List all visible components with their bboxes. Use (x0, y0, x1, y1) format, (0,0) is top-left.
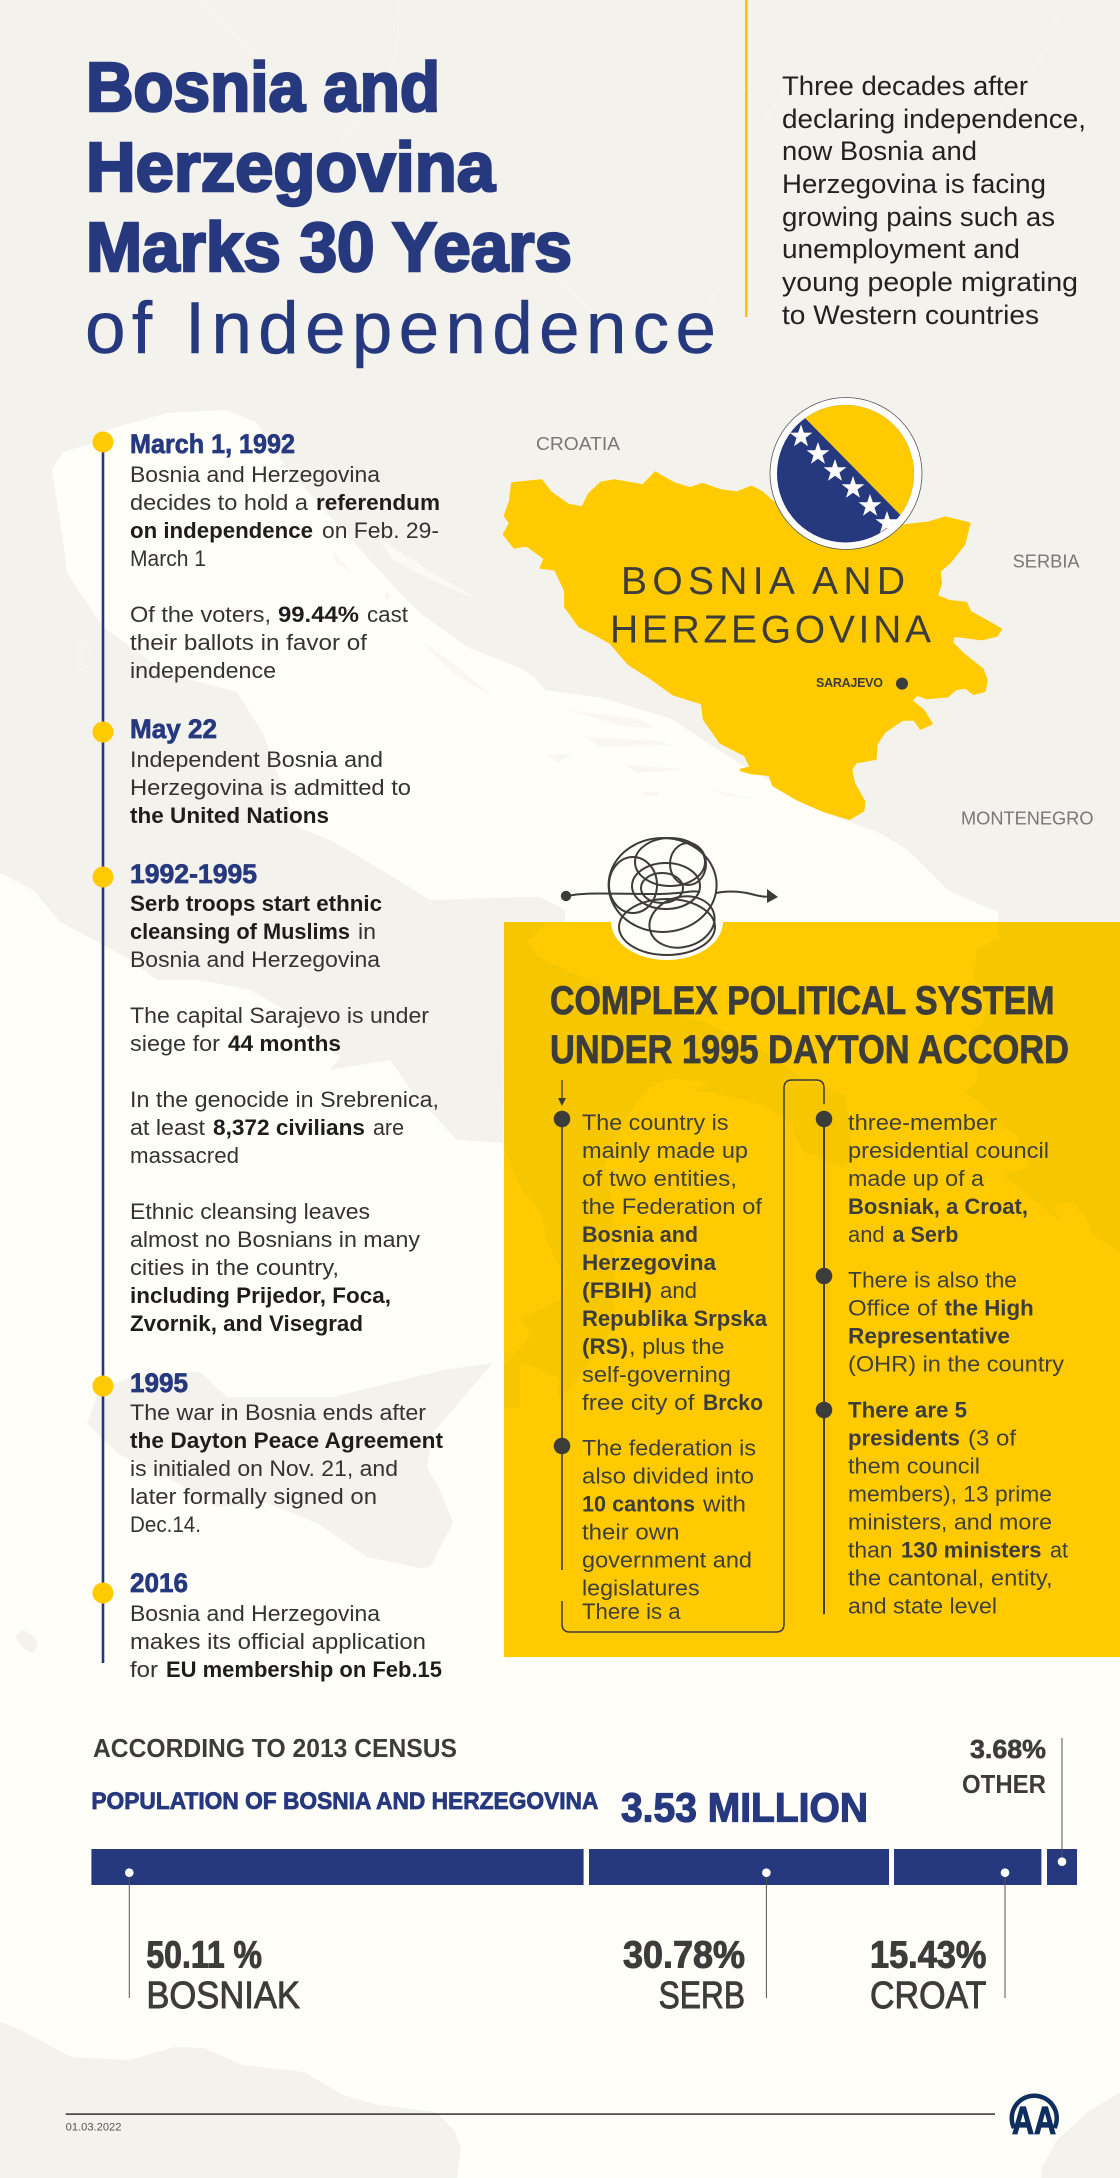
intro text: declaring independence, (782, 104, 1086, 134)
event: 1992-1995: 8,372 civilians (213, 1115, 365, 1140)
column 1 text: The country is (582, 1110, 728, 1135)
column 1 text: free city of (582, 1390, 695, 1415)
value: Other (962, 1734, 1046, 1799)
event: 1995 (92, 1368, 444, 1537)
neighbour label: Montenegro: MONTENEGRO (961, 809, 1094, 829)
event: 2016 (92, 1568, 442, 1682)
intro text: Herzegovina is facing (782, 169, 1046, 199)
column 2 text: members), 13 prime (848, 1482, 1052, 1507)
leader lines (129, 1738, 1062, 1998)
intro text: now Bosnia and (782, 136, 977, 166)
sea channel details (377, 537, 480, 600)
event: March 1, 1992: Bosnia and Herzegovina (130, 462, 381, 487)
column 2 text: (OHR) in the country (848, 1352, 1064, 1376)
event: March 1, 1992 (92, 429, 440, 683)
capital: Sarajevo: SARAJEVO (816, 676, 883, 690)
column 1 text: (RS) (582, 1334, 628, 1359)
column 2 text: three-member (848, 1110, 997, 1135)
column 2 text: the cantonal, entity, (848, 1566, 1053, 1591)
event: 1992-1995: The capital Sarajevo is under (130, 1003, 429, 1028)
panel background (504, 922, 1120, 1657)
event: March 1, 1992: referendum (316, 490, 440, 515)
census section (91, 1733, 1077, 2017)
column 1 text: legislatures (582, 1576, 700, 1600)
event: March 1, 1992: on independence (130, 518, 313, 543)
column 2 text: There are 5 (848, 1398, 967, 1423)
event: May 22 (92, 714, 411, 828)
neighbour label: Croatia: CROATIA (536, 434, 620, 454)
event: 1992-1995: cleansing of Muslims (130, 919, 350, 944)
column 2 text (848, 1110, 1068, 1619)
column 1 text: also divided into (582, 1464, 754, 1488)
event: 1992-1995: 44 months (228, 1031, 341, 1056)
value: Bosniak (146, 1935, 300, 2017)
bar markers (125, 1857, 1066, 1877)
country name: BOSNIA AND (621, 560, 905, 603)
event: 1992-1995: at least (130, 1115, 205, 1140)
event: 1992-1995: massacred (130, 1143, 239, 1168)
event: March 1, 1992: independence (130, 658, 276, 683)
event: March 1, 1992: decides to hold a (130, 490, 309, 515)
column 1 text: mainly made up (582, 1138, 748, 1163)
map: Bosnia and Herzegovina (504, 434, 1093, 829)
column 2 text: presidents (848, 1426, 960, 1451)
column 2 text: (3 of (968, 1426, 1017, 1451)
timeline axis (102, 442, 104, 1663)
column 1 text: Bosnia and (582, 1222, 698, 1247)
intro text: unemployment and (782, 234, 1020, 264)
stacked population bar (91, 1849, 1077, 1885)
notch behind squiggle (611, 921, 723, 960)
column 1 text: the Federation of (582, 1194, 763, 1219)
event: 1992-1995 (92, 859, 439, 1336)
population value: 3.53 MILLION (621, 1785, 868, 1831)
value: Croat (870, 1935, 986, 2017)
event: 1995: Dec.14. (130, 1512, 201, 1537)
event: 1995: 1995 (130, 1368, 188, 1398)
event: 1992-1995: are (373, 1115, 404, 1140)
event: 1992-1995: 1992-1995 (130, 859, 257, 889)
panel: complex political system (504, 921, 1120, 1657)
column 1 text: with (702, 1492, 746, 1516)
column 1 text: Republika Srpska (582, 1306, 768, 1331)
event: 2016: 2016 (130, 1568, 188, 1598)
event: March 1, 1992: on Feb. 29- (322, 518, 439, 543)
value: Serb (623, 1935, 745, 2017)
column 1 text: government and (582, 1548, 752, 1572)
event: 1992-1995: Zvornik, and Visegrad (130, 1311, 363, 1336)
event: 2016: EU membership on Feb.15 (166, 1657, 442, 1682)
column 2 text: and state level (848, 1594, 997, 1619)
panel map texture (504, 922, 1120, 1408)
census heading: ACCORDING TO 2013 CENSUS (93, 1733, 457, 1763)
event: 2016: for (130, 1657, 158, 1682)
event: 1992-1995: almost no Bosnians in many (130, 1227, 420, 1252)
timeline (92, 429, 444, 1682)
event: March 1, 1992: 99.44% (278, 602, 359, 627)
column 2 text: made up of a (848, 1166, 985, 1191)
event: 1995: later formally signed on (130, 1484, 377, 1509)
footer (66, 2096, 1057, 2143)
column 2 text: Representative (848, 1324, 1010, 1348)
value: Other: OTHER (962, 1769, 1046, 1799)
column 1 text: of two entities, (582, 1166, 737, 1191)
icon: Bosnian flag (770, 397, 922, 550)
event: March 1, 1992: March 1, 1992 (130, 429, 295, 459)
column 2 text: a Serb (892, 1222, 958, 1247)
column 2 text: at (1050, 1538, 1068, 1563)
column 1 text: Herzegovina (582, 1250, 717, 1275)
event: 1992-1995: cities in the country, (130, 1255, 339, 1280)
event: May 22: Independent Bosnia and (130, 747, 383, 772)
intro text: to Western countries (782, 300, 1039, 330)
intro text: Three decades after (782, 71, 1028, 101)
column 2 text: them council (848, 1454, 980, 1479)
title: Bosnia and (86, 48, 440, 126)
column 2 text: Office of (848, 1296, 938, 1320)
event: 1992-1995: Bosnia and Herzegovina (130, 947, 381, 972)
flow dots and arrow head (554, 1098, 832, 1454)
population label: POPULATION OF BOSNIA AND HERZEGOVINA (91, 1788, 598, 1815)
event: March 1, 1992: March 1 (130, 546, 206, 571)
column 2 text: 130 ministers (901, 1538, 1042, 1563)
column 2 text: presidential council (848, 1138, 1049, 1163)
event: 2016: makes its official application (130, 1629, 426, 1654)
value: Serb: SERB (659, 1975, 745, 2017)
value: Croat: 15.43% (870, 1935, 986, 1977)
footer rule (66, 2113, 995, 2115)
connector flow lines (562, 1080, 824, 1632)
event: 1992-1995: Serb troops start ethnic (130, 891, 382, 916)
column 1 text: Brcko (703, 1390, 763, 1415)
event: 2016: Bosnia and Herzegovina (130, 1601, 381, 1626)
column 1 text (582, 1110, 768, 1624)
event: 1992-1995: in (358, 919, 376, 944)
event: 1992-1995: siege for (130, 1031, 220, 1056)
column 2 text: than (848, 1538, 892, 1563)
event: 1992-1995: Ethnic cleansing leaves (130, 1199, 370, 1224)
title: Marks 30 Years (86, 208, 572, 286)
column 2 text: the High (945, 1296, 1034, 1320)
icon: tangled line arrow (561, 838, 778, 955)
value: Serb: 30.78% (623, 1935, 745, 1977)
neighbour label: Serbia: SERBIA (1013, 552, 1080, 572)
column 2 text: There is also the (848, 1268, 1017, 1292)
column 1 text: self-governing (582, 1362, 731, 1387)
column 1 text: , plus the (629, 1334, 724, 1359)
column 2 text: and (848, 1222, 885, 1247)
event: 1995: The war in Bosnia ends after (130, 1400, 426, 1425)
value: Croat: CROAT (870, 1975, 986, 2017)
column 1 text: 10 cantons (582, 1492, 695, 1516)
title: of Independence (85, 288, 716, 369)
column 1 text: The federation is (582, 1436, 756, 1460)
event: March 1, 1992: Of the voters, (130, 602, 271, 627)
intro text: young people migrating (782, 267, 1078, 297)
title (85, 48, 716, 369)
column 2 text: Bosniak, a Croat, (848, 1194, 1028, 1219)
column 2 text: ministers, and more (848, 1510, 1052, 1535)
title: Herzegovina (86, 128, 496, 206)
event: 1992-1995: including Prijedor, Foca, (130, 1283, 391, 1308)
event: May 22: the United Nations (130, 803, 329, 828)
country name: HERZEGOVINA (610, 608, 931, 652)
value: Bosniak: BOSNIAK (146, 1975, 300, 2017)
coastal islands (333, 550, 762, 800)
event: May 22: May 22 (130, 714, 217, 744)
column 1 text: their own (582, 1520, 680, 1544)
event: March 1, 1992: cast (367, 602, 408, 627)
panel heading (550, 979, 1069, 1072)
event: 1995: the Dayton Peace Agreement (130, 1428, 444, 1453)
event: 1992-1995: In the genocide in Srebrenica, (130, 1087, 439, 1112)
icon: AA logo: AA (1012, 2100, 1056, 2143)
column 1 text: (FBIH) (582, 1278, 652, 1303)
yellow vertical divider (745, 0, 748, 317)
event: 1995: is initialed on Nov. 21, and (130, 1456, 398, 1481)
value: Bosniak: 50.11 % (146, 1935, 262, 1977)
country name (610, 560, 931, 652)
country shape (504, 473, 1000, 819)
event: May 22: Herzegovina is admitted to (130, 775, 411, 800)
intro text (782, 71, 1086, 330)
value: Other: 3.68% (970, 1734, 1046, 1764)
intro text: growing pains such as (782, 202, 1055, 232)
column 1 text: There is a (582, 1599, 681, 1624)
column 1 text: and (660, 1278, 697, 1303)
date: 01.03.2022 (66, 2122, 121, 2134)
event: March 1, 1992: their ballots in favor of (130, 630, 368, 655)
